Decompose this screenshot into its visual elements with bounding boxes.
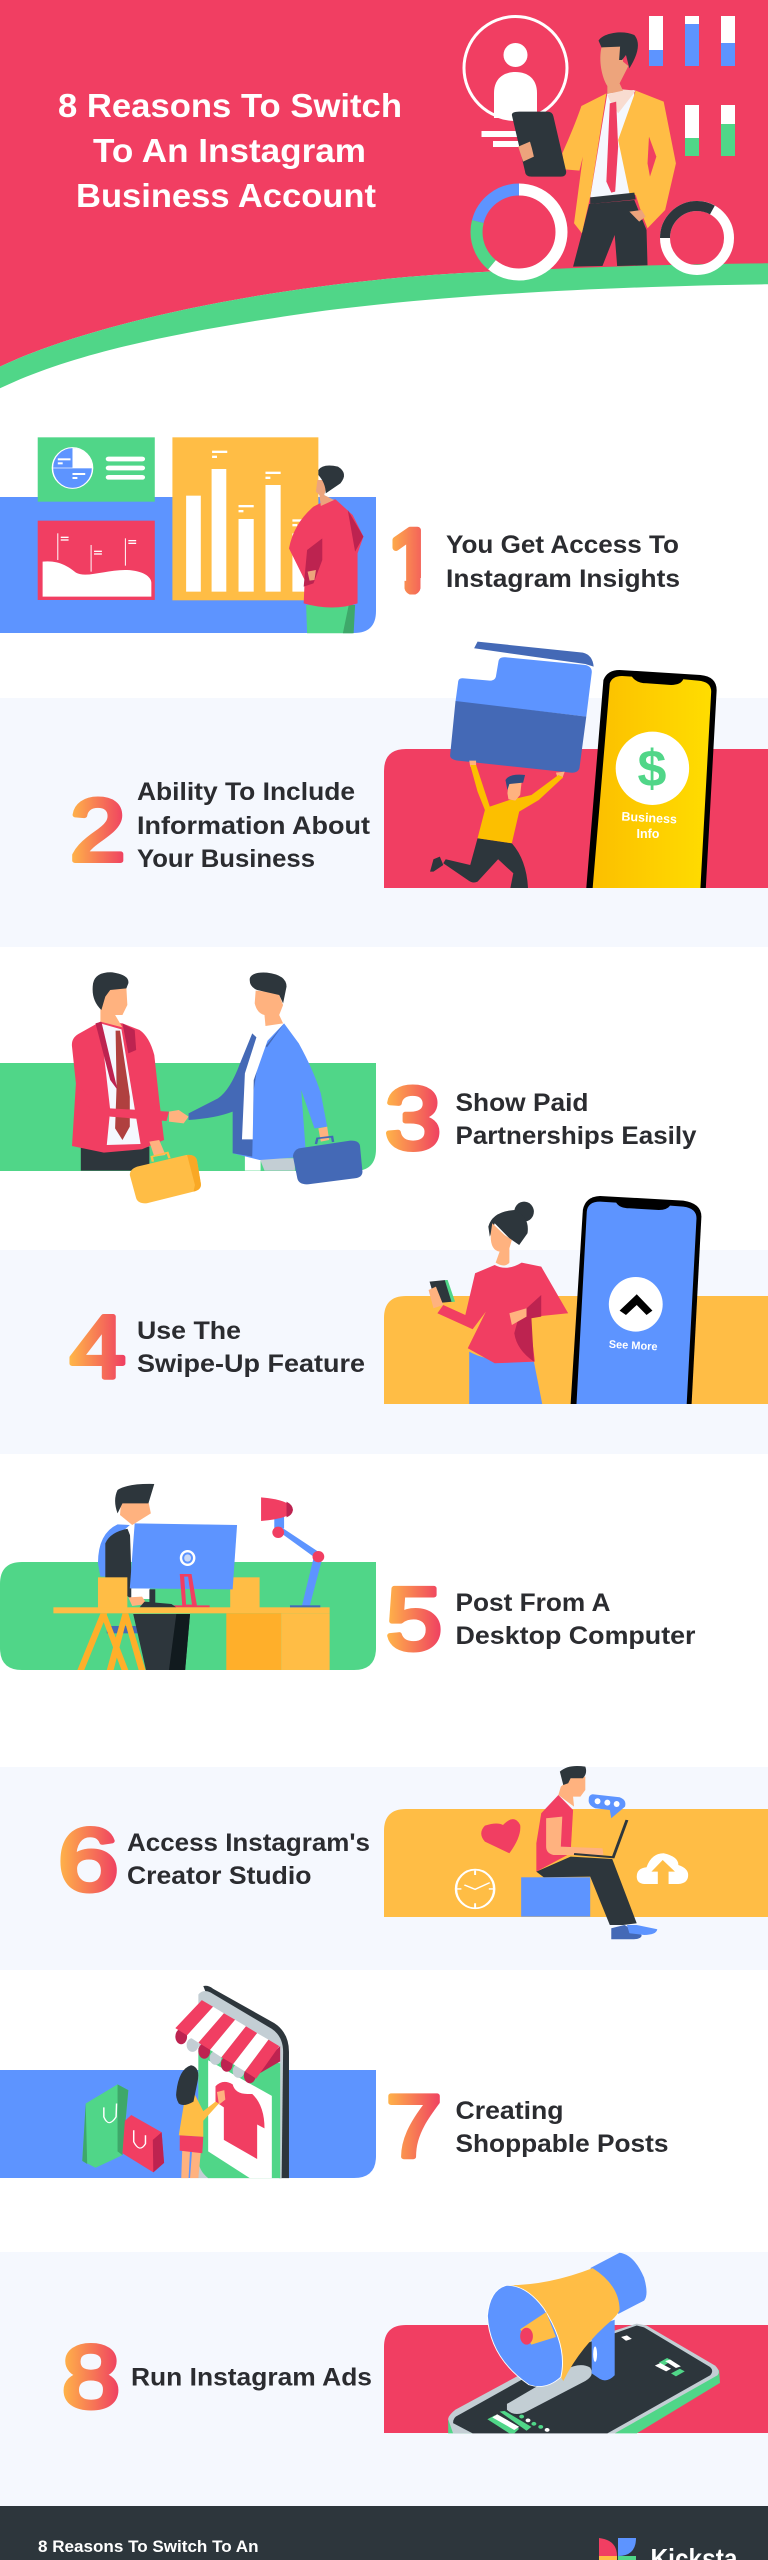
ring chart small [665,206,729,270]
section 7: shoppable posts [0,1986,668,2178]
section 2: business info [70,642,768,888]
mini bar charts [649,16,735,156]
section 3: paid partnerships [0,972,697,1203]
heading 4 [137,1317,365,1378]
background bands [0,698,768,2506]
section 8: ads [62,2253,768,2433]
section 1: insights [0,437,680,633]
number 8: 8 [62,2327,120,2426]
phone: business info: $ [638,740,667,798]
heading 5: Post From A [456,1589,610,1617]
phone: business info: Info [637,827,660,841]
heading 6: Access Instagram's [127,1829,370,1857]
section 4: swipe up [70,1196,768,1404]
phone: business info [586,670,717,888]
heading 6: Creator Studio [127,1862,312,1890]
panel: blue [0,2070,376,2178]
heading 5: Desktop Computer [456,1622,696,1650]
heading 3: Partnerships Easily [456,1122,697,1150]
two businessmen shaking hands [72,972,362,1203]
number 6: 6 [58,1810,118,1909]
heading 7 [456,2097,668,2158]
heading 4: Use The [137,1317,241,1345]
hero header [0,0,768,388]
megaphone on phone [448,2253,720,2433]
panel: red [384,2325,768,2433]
title: 8 Reasons To Switch [58,87,402,124]
section 6: creator studio [58,1766,768,1939]
heading 2 [137,778,371,873]
footer title: 8 Reasons To Switch To An [38,2537,258,2556]
number 5: 5 [386,1569,442,1668]
panel: green [0,1562,376,1670]
folder and jumping man [430,642,594,888]
number 1: 1 [388,511,436,610]
heading 7: Shoppable Posts [456,2130,668,2158]
panel: red [384,749,768,888]
heading 7: Creating [456,2097,564,2125]
heading 1 [446,531,680,593]
woman with phone [429,1202,568,1404]
businessman with tablet [512,32,676,267]
panel: green [0,1063,376,1171]
heading 4: Swipe-Up Feature [137,1350,365,1378]
man at desktop computer [53,1484,330,1670]
heading 3: Show Paid [456,1089,588,1117]
dashboard cards and analyst [38,437,363,633]
title [58,87,402,214]
number 7: 7 [386,2076,442,2176]
panel: yellow [384,1809,768,1917]
number 2: 2 [70,780,126,880]
title: Business Account [76,177,376,214]
man on laptop with icons [456,1766,688,1939]
heading 6 [127,1829,370,1890]
profile icon circle [464,16,567,147]
heading 3 [456,1089,697,1150]
phone: see more [571,1196,701,1404]
shop phone, shopper and bags [82,1986,289,2178]
heading 1: Instagram Insights [446,565,680,593]
heading 2: Ability To Include [137,778,355,806]
section 5: desktop [0,1484,696,1670]
title: To An Instagram [93,132,366,169]
heading 1: You Get Access To [446,531,679,559]
heading 5 [456,1589,696,1650]
phone: business info: Business [621,810,677,826]
ring chart large [476,190,562,274]
heading 8: Run Instagram Ads [131,2364,372,2392]
number 3: 3 [385,1068,441,1168]
phone: see more: See More [608,1339,658,1353]
footer [0,2506,768,2560]
number 4: 4 [70,1298,126,1396]
Kicksta logo [599,2538,738,2560]
heading 2: Your Business [137,845,315,873]
panel: blue [0,497,376,633]
panel: yellow [384,1296,768,1404]
heading 2: Information About [137,812,371,840]
